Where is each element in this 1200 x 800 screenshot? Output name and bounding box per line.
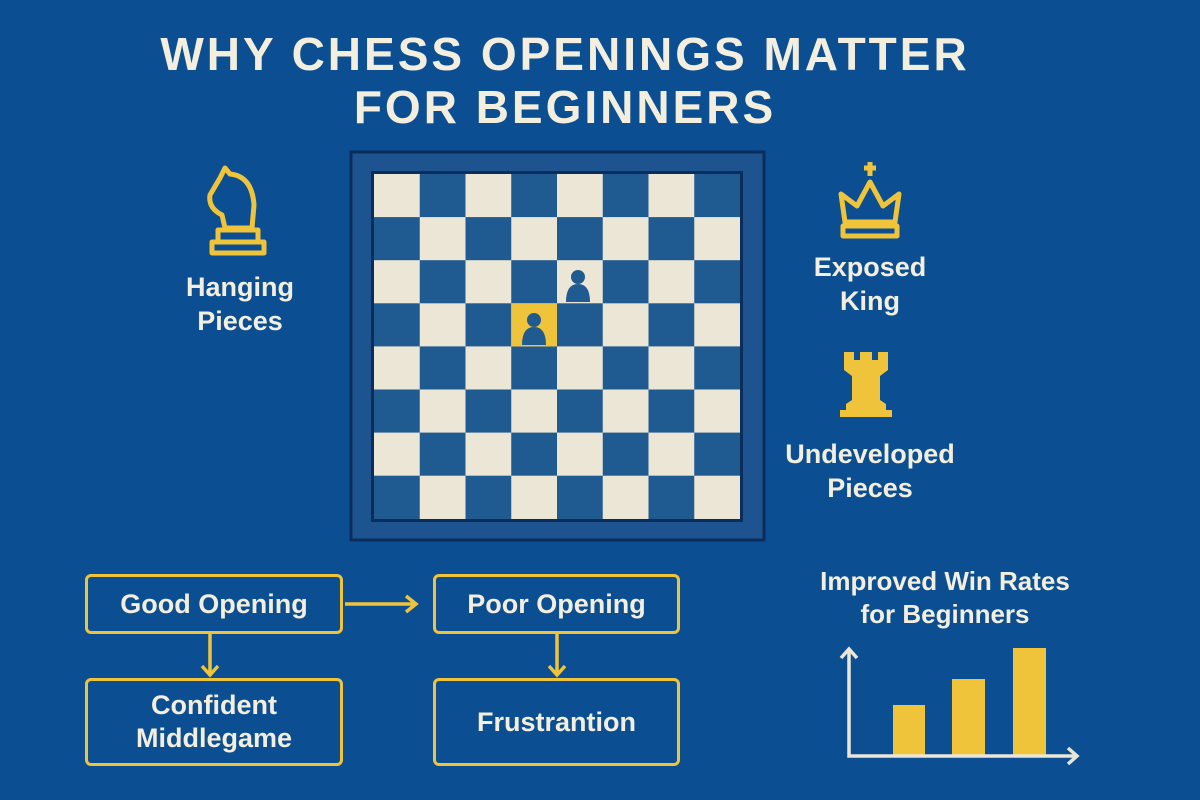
box: frustrantion	[433, 678, 680, 766]
box: poor opening: Poor Opening	[467, 588, 646, 618]
chart title: for Beginners	[860, 599, 1030, 629]
text: undeveloped pieces: Pieces	[827, 473, 913, 503]
text: hanging pieces	[186, 272, 294, 336]
icon: rook	[840, 352, 892, 417]
flowchart	[85, 574, 680, 766]
title: WHY CHESS OPENINGS MATTER	[160, 28, 970, 80]
icon: knight	[207, 166, 266, 256]
icon: king	[838, 162, 902, 238]
text: undeveloped pieces	[785, 439, 955, 503]
text: exposed king: King	[840, 286, 900, 316]
text: exposed king	[814, 252, 926, 316]
text: undeveloped pieces: Undeveloped	[785, 439, 955, 469]
box: frustrantion: Frustrantion	[477, 706, 636, 736]
title: FOR BEGINNERS	[354, 81, 776, 133]
text: hanging pieces: Hanging	[186, 272, 294, 302]
box: poor opening	[433, 574, 680, 634]
arrows	[200, 594, 566, 678]
text: hanging pieces: Pieces	[197, 306, 283, 336]
box: confident middlegame: Confident	[151, 690, 277, 720]
text: exposed king: Exposed	[814, 252, 926, 282]
title	[160, 28, 970, 133]
box: good opening: Good Opening	[120, 588, 308, 618]
chart title: Improved Win Rates	[820, 566, 1070, 596]
box: confident middlegame	[85, 678, 343, 766]
box: confident middlegame: Middlegame	[136, 723, 292, 753]
box: good opening	[85, 574, 343, 634]
bar chart	[840, 646, 1080, 766]
chart title	[820, 566, 1070, 629]
